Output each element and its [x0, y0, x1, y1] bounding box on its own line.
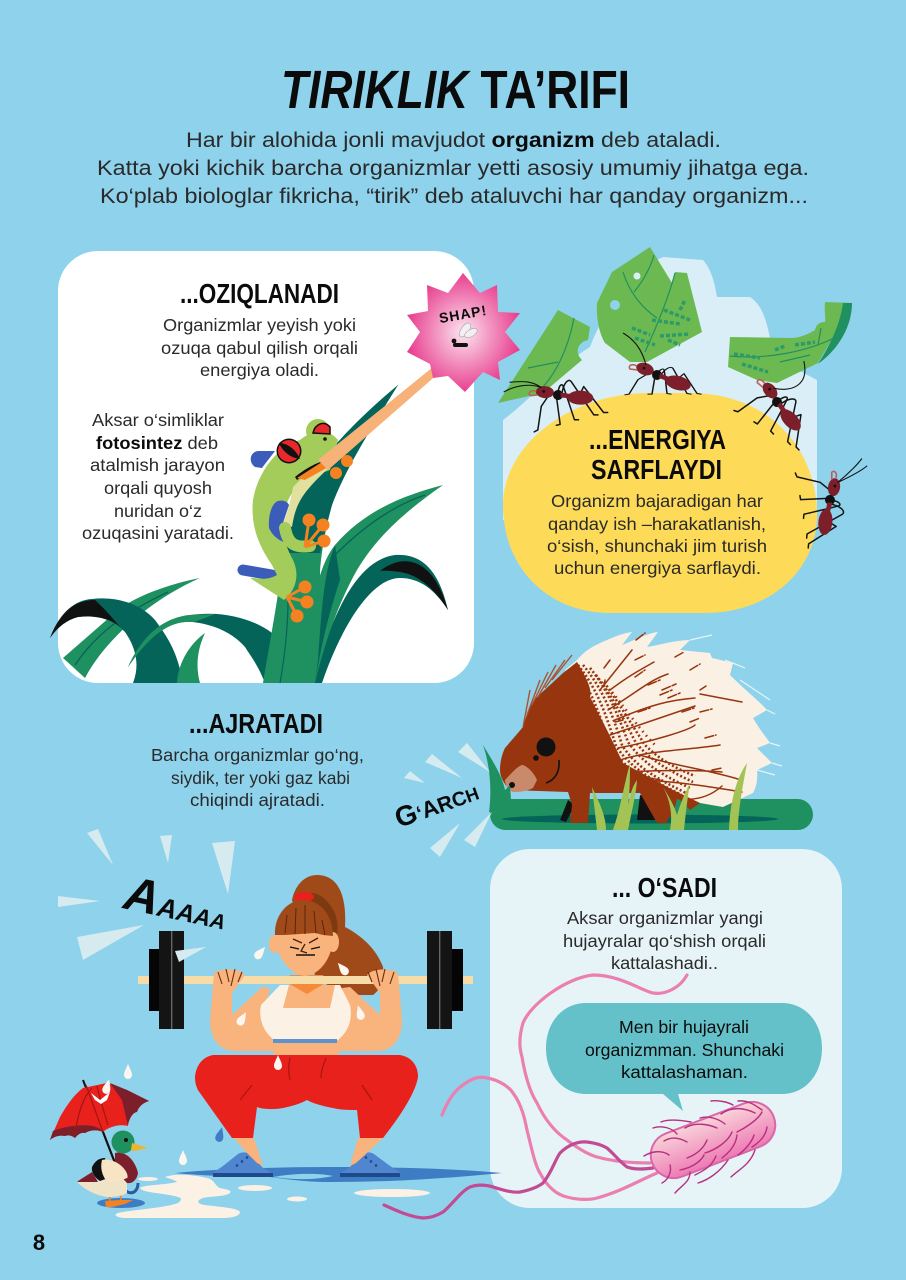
right leaf — [300, 485, 443, 683]
front grass — [592, 763, 747, 830]
burst lines: Aaaaa — [58, 829, 235, 960]
icon: duck with umbrella — [50, 1080, 149, 1208]
handle — [83, 1080, 120, 1178]
legs — [109, 1190, 121, 1201]
text: energy: Organizm bajaradigan har — [551, 491, 763, 511]
ground shadow — [502, 814, 778, 824]
text: photosynthesis: fotosintez deb — [96, 433, 218, 453]
sweat drops — [124, 944, 366, 1165]
middle leaf — [128, 614, 272, 683]
text: feeding: Organizmlar yeyish yoki — [163, 315, 356, 335]
black rump — [92, 1158, 108, 1181]
right eye — [313, 423, 330, 434]
icon: SHAP burst — [407, 273, 520, 392]
label: SHAP: SHAP! — [438, 302, 488, 326]
heading: energy — [589, 424, 726, 485]
text: photosynthesis — [82, 410, 234, 543]
trouser folds — [240, 1058, 372, 1100]
icon: ant 1 — [502, 361, 608, 437]
hair front — [275, 900, 333, 936]
tail — [77, 1172, 98, 1182]
icon: bacterium — [384, 975, 782, 1218]
page number: 8 — [33, 1230, 45, 1255]
barbell bar — [138, 976, 473, 984]
hook — [122, 1180, 138, 1193]
top spines — [523, 655, 572, 727]
text: energy: qanday ish –harakatlanish, — [548, 514, 766, 534]
intro text: Ko‘plab biologlar fikricha, “tirik” deb ataluvchi har qanday organizm... — [100, 185, 808, 208]
heading: feeding: ...OZIQLANADI — [180, 278, 339, 309]
speckle transition — [574, 665, 695, 797]
right curl leaf — [313, 555, 448, 683]
right plates — [427, 931, 463, 1029]
feet — [105, 1200, 133, 1207]
flagella — [384, 975, 687, 1218]
intro text: Katta yoki kichik barcha organizmlar yetti asosiy umumiy jihatga ega. — [97, 157, 809, 180]
text: excretes: Barcha organizmlar go‘ng, — [151, 745, 364, 765]
text: energy — [547, 491, 767, 578]
duck puddle — [97, 1198, 145, 1208]
hairs — [644, 1101, 767, 1193]
tongue — [318, 346, 463, 470]
panel: energy yellow bubble — [503, 393, 817, 613]
speech bubble — [546, 1003, 822, 1111]
left eye — [276, 438, 302, 464]
brown body — [500, 662, 700, 823]
blue drop — [214, 1126, 226, 1143]
facial features — [290, 938, 320, 955]
text: energy: o‘sish, shunchaki jim turish — [547, 536, 767, 556]
snout — [505, 765, 537, 792]
text: feeding — [161, 315, 358, 380]
text: excretes: chiqindi ajratadi. — [190, 790, 325, 810]
stalk — [263, 385, 398, 683]
left shoe — [213, 1152, 273, 1177]
left plates — [149, 931, 184, 1029]
icon: weightlifter — [116, 875, 502, 1218]
torso skin — [268, 985, 345, 1055]
panel: grows — [490, 849, 842, 1208]
text: photosynthesis: ozuqasini yaratadi. — [82, 523, 234, 543]
text: excretes — [151, 745, 364, 810]
back blue patch — [251, 451, 275, 468]
speech bubble: kattalashaman. — [621, 1062, 748, 1082]
icon: ant 3 — [734, 343, 840, 451]
left dark curl — [50, 598, 183, 683]
shins — [234, 1138, 383, 1166]
icon: leaf centre — [597, 247, 702, 362]
sound word: G'ARCH: G‘ARCH — [390, 775, 482, 834]
icon: leaf left — [498, 310, 590, 403]
right shoe — [340, 1152, 400, 1177]
neck — [286, 975, 327, 994]
red trousers — [195, 1055, 418, 1138]
lower handle — [103, 1132, 120, 1178]
text: photosynthesis: orqali quyosh — [104, 478, 212, 498]
face — [277, 933, 331, 976]
orange hands and feet — [287, 444, 352, 621]
small puddles — [138, 1177, 430, 1202]
frog body — [250, 431, 338, 600]
right eye bump — [306, 419, 330, 443]
text: grows: kattalashadi.. — [611, 953, 718, 973]
head — [112, 1130, 134, 1154]
heading: grows: ... O‘SADI — [612, 872, 717, 903]
ponytail band — [294, 892, 314, 902]
leg blue toe — [243, 570, 272, 575]
belly — [283, 462, 335, 527]
eye — [124, 1138, 128, 1142]
icon: ant 4 — [795, 458, 878, 548]
icon: porcupine scene — [483, 632, 813, 830]
drop on umbrella — [101, 1078, 113, 1095]
chest — [115, 1152, 138, 1183]
umbrella logo — [91, 1092, 110, 1104]
black back legs — [560, 795, 657, 822]
arm — [285, 528, 310, 547]
cell body — [644, 1095, 782, 1185]
intro text: Har bir alohida jonli mavjudot organizm deb ataladi. — [186, 129, 721, 152]
puddle — [116, 1175, 240, 1218]
small leaf — [177, 633, 205, 683]
text: photosynthesis: atalmish jarayon — [90, 455, 225, 475]
shadow — [175, 1167, 502, 1182]
icon: leaf right — [728, 302, 852, 383]
panel: energy background cloud — [503, 257, 817, 520]
heading: energy: ...ENERGIYA — [589, 424, 726, 455]
text: energy: uchun energiya sarflaydi. — [554, 558, 761, 578]
mouth — [295, 458, 342, 480]
shadow highlight — [273, 1174, 333, 1179]
intro text — [97, 129, 809, 208]
text: grows — [563, 908, 766, 973]
text: feeding: energiya oladi. — [200, 360, 319, 380]
heading: energy: SARFLAYDI — [591, 454, 722, 485]
icon: fly — [452, 321, 479, 347]
text: photosynthesis: Aksar o‘simliklar — [92, 410, 224, 430]
burst piece on plate — [175, 947, 206, 962]
heading: excretes: ...AJRATADI — [189, 708, 323, 739]
knuckles — [218, 969, 394, 986]
wing — [101, 1160, 128, 1182]
ear — [536, 738, 556, 756]
text: photosynthesis: nuridan o‘z — [114, 501, 202, 521]
text: grows: Aksar organizmlar yangi — [567, 908, 763, 928]
thigh blue — [269, 501, 289, 542]
left arm — [210, 969, 272, 1051]
hair back — [292, 875, 383, 995]
left back leaf — [63, 578, 200, 678]
text: feeding: ozuqa qabul qilish orqali — [161, 338, 358, 358]
umbrella canopy — [50, 1083, 149, 1140]
top — [260, 985, 351, 1040]
nose grass — [483, 745, 511, 812]
band — [273, 1039, 337, 1043]
ground — [490, 799, 813, 830]
speech bubble: Men bir hujayrali — [619, 1017, 749, 1037]
text: grows: hujayralar qo‘shish orqali — [563, 931, 766, 951]
quill dashes — [600, 633, 742, 799]
burst lines: G'ARCH — [404, 743, 492, 857]
icon: frog — [243, 346, 463, 621]
belly — [77, 1178, 127, 1197]
right arm — [340, 969, 402, 1051]
icon: ant 2 — [623, 333, 701, 395]
white quills — [565, 632, 772, 807]
plant — [50, 385, 448, 683]
panel: feeding — [58, 251, 474, 683]
title: TIRIKLIK TA’RIFI — [281, 60, 630, 120]
ears — [269, 935, 279, 953]
eye — [533, 755, 539, 761]
bill — [131, 1143, 148, 1151]
umbrella shade — [50, 1083, 149, 1140]
nose — [509, 782, 515, 788]
smile — [546, 760, 559, 783]
sound word: Aaaaa: AAAAA — [119, 867, 232, 940]
speech bubble: organizmman. Shunchaki — [585, 1040, 784, 1060]
text: excretes: siydik, ter yoki gaz kabi — [171, 768, 350, 788]
